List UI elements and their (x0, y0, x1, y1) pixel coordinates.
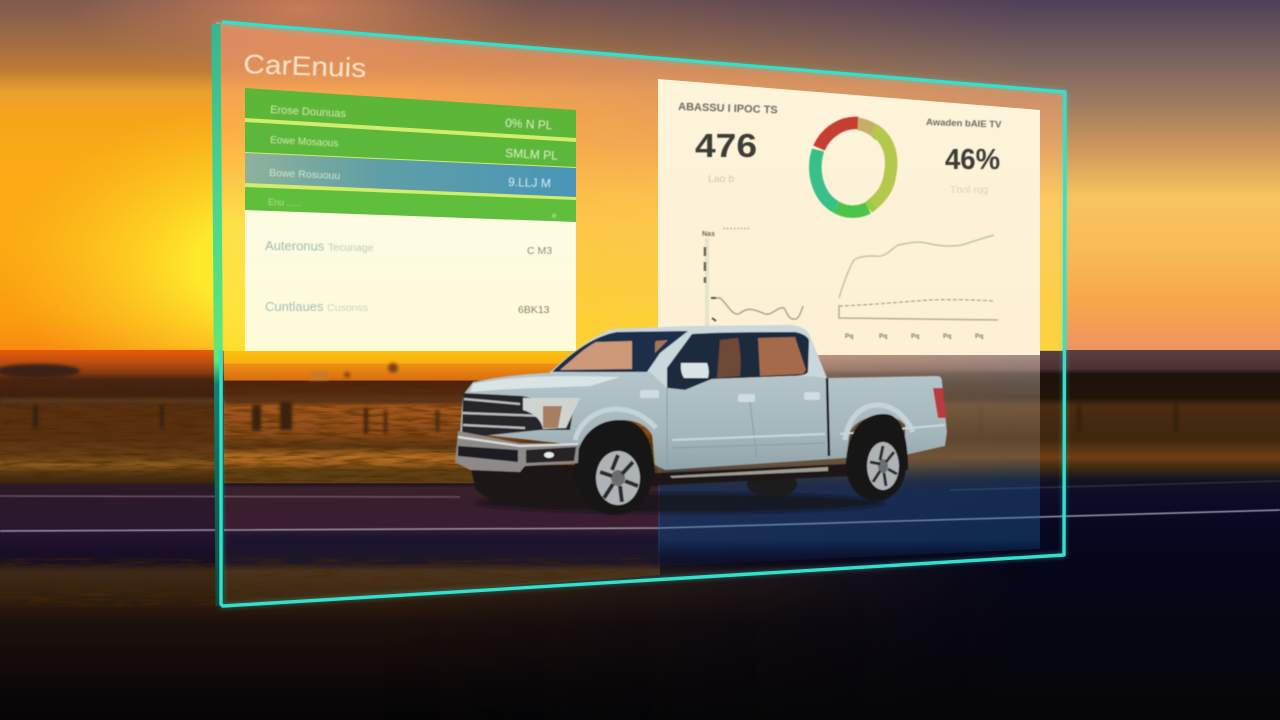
teal panel frame (216, 22, 1065, 606)
side windows (667, 332, 809, 390)
field and grass texture (0, 382, 660, 606)
side mirror (681, 363, 709, 378)
small line chart: Nas (702, 231, 715, 238)
landscape: fields, fence, road and grass (0, 350, 1280, 720)
truck underside (470, 464, 850, 506)
hood highlight (470, 376, 620, 392)
taillight (933, 388, 946, 418)
grille (462, 393, 575, 438)
large line chart: Pq (911, 333, 919, 340)
metric right: Tbol rqg (950, 184, 989, 196)
lower right translucent card extension (658, 355, 1040, 566)
metric right (926, 117, 1002, 196)
status row 2 (245, 122, 576, 167)
status row 4: Enu ...... (268, 197, 302, 208)
status row 3 highlighted (245, 153, 576, 197)
table row: Customers (265, 299, 550, 316)
rear wheel (846, 429, 906, 501)
headlight (523, 398, 580, 429)
metric right: 46% (945, 144, 1000, 176)
status row 1 (245, 88, 576, 138)
metric left: 476 (695, 127, 757, 164)
truck body (460, 372, 947, 470)
status row 1: Erose Dounuas (270, 104, 347, 120)
brighter landscape seen through glass (224, 350, 660, 606)
large line chart (839, 235, 998, 340)
front bumper (455, 431, 579, 472)
truck cab and glass top (548, 325, 827, 392)
right analytics card (658, 79, 1040, 355)
small line chart (702, 226, 803, 330)
large line chart: Pq (845, 333, 853, 340)
far rear wheel (747, 471, 797, 497)
status row 1: 0% N PL (505, 116, 553, 132)
front wheel (576, 437, 652, 515)
metric left: ABASSU I IPOC TS (678, 101, 778, 116)
panel title: CarEnuis (243, 49, 367, 83)
glass dashboard panel (216, 22, 1066, 606)
status row 4: e (552, 211, 557, 220)
metric left (678, 101, 778, 185)
status row 3 highlighted: Bowe Rosuouu (269, 167, 341, 182)
large line chart: Pq (879, 333, 887, 340)
status row 4 (245, 187, 576, 222)
wheel arch flares (575, 409, 656, 440)
table row: Customers: 6BK13 (518, 304, 550, 316)
large line chart: Pq (975, 333, 983, 340)
door lines and handles (640, 378, 945, 465)
metric left: Lao b (708, 173, 734, 185)
windshield (552, 331, 688, 372)
table row: Customers: Cuntlaues Cusonss (265, 299, 368, 314)
donut chart (815, 123, 891, 212)
small line chart: •••••••• (723, 226, 751, 233)
left status card (245, 88, 576, 351)
wheel wells (574, 420, 655, 478)
pickup truck (455, 325, 947, 515)
status row 3 highlighted: 9.LLJ M (508, 175, 551, 190)
table row: Autonomous: C M3 (527, 245, 552, 257)
running board (670, 467, 828, 478)
truck shadow (475, 493, 885, 513)
table row: Autonomous: Auteronus Tecunage (265, 238, 374, 254)
metric right: Awaden bAIE TV (926, 117, 1002, 131)
large line chart: Pq (943, 333, 951, 340)
sunset sky background (0, 0, 1280, 352)
road lane lines (0, 481, 1280, 531)
status row 2: SMLM PL (505, 146, 559, 163)
status row 2: Eowe Mosaous (270, 135, 339, 150)
panel tint (216, 22, 1066, 351)
table row: Autonomous (265, 238, 552, 257)
